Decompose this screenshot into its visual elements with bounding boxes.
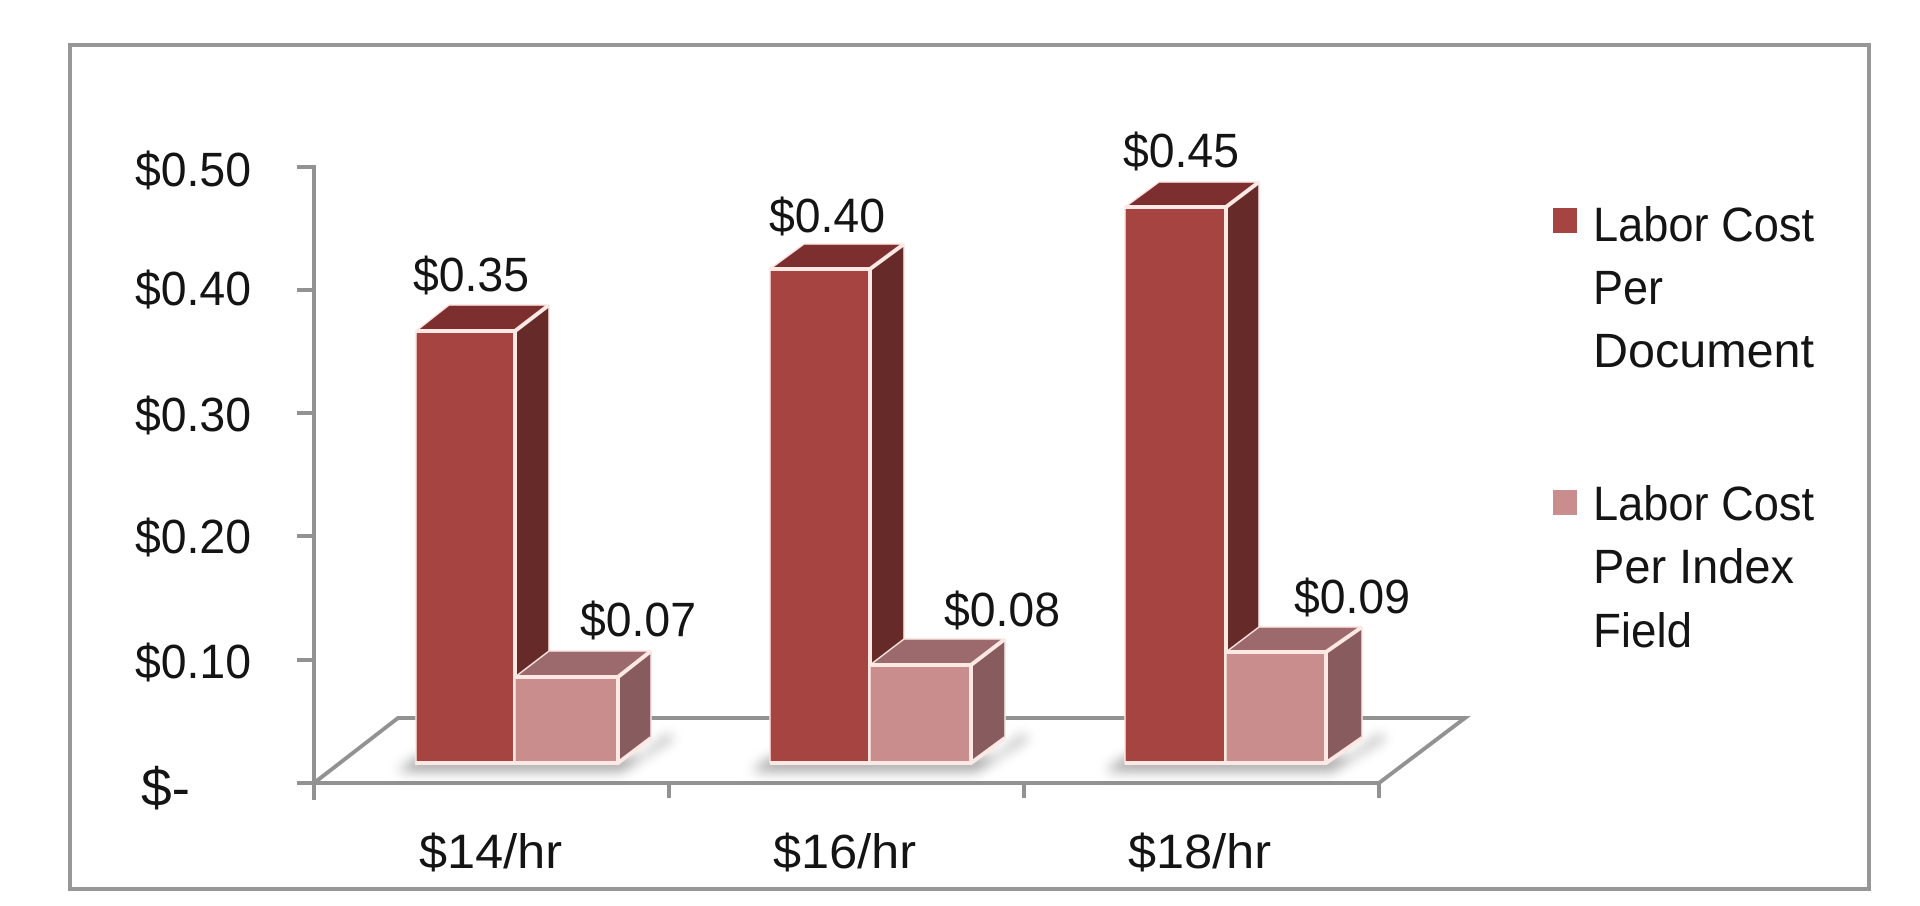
bar: labor cost per index field $0.09 xyxy=(1125,627,1362,763)
legend xyxy=(1553,199,1814,658)
bar: labor cost per index field $0.07 xyxy=(415,651,651,763)
y axis labels: $0.30 xyxy=(135,389,251,442)
bar group: $14/hr xyxy=(415,305,651,763)
legend: labor cost per index field: Field xyxy=(1593,605,1692,658)
x axis labels: $14/hr xyxy=(419,826,562,879)
bar shadows xyxy=(398,734,1386,772)
data labels: $0.09 xyxy=(1294,571,1410,624)
legend: labor cost per document xyxy=(1553,199,1814,378)
x axis labels xyxy=(419,826,1271,879)
y axis labels: $0.50 xyxy=(135,144,251,197)
y axis labels: $0.20 xyxy=(135,511,251,564)
legend: labor cost per document: Per xyxy=(1593,262,1663,315)
legend: labor cost per document: Document xyxy=(1593,325,1814,378)
x axis labels: $16/hr xyxy=(773,826,916,879)
data labels: $0.08 xyxy=(944,584,1060,637)
bar group: $16/hr xyxy=(770,244,1005,763)
bar: labor cost per index field $0.08 xyxy=(770,639,1005,763)
legend: labor cost per index field: Labor Cost xyxy=(1593,478,1814,531)
bar: labor cost per document $0.40 xyxy=(770,244,904,763)
data labels: $0.45 xyxy=(1123,125,1239,178)
bar: labor cost per document $0.45 xyxy=(1125,182,1259,763)
x axis labels: $18/hr xyxy=(1128,826,1271,879)
legend: labor cost per index field: Per Index xyxy=(1593,541,1794,594)
3D floor and x axis xyxy=(314,718,1465,798)
y axis labels xyxy=(135,144,251,818)
data labels: $0.07 xyxy=(580,594,696,647)
data labels: $0.40 xyxy=(769,190,885,243)
y axis with tick marks xyxy=(297,165,314,800)
data labels: $0.35 xyxy=(413,249,529,302)
y axis labels: $0.10 xyxy=(135,636,251,689)
data labels xyxy=(413,125,1410,647)
legend: labor cost per document: Labor Cost xyxy=(1593,199,1814,252)
legend: labor cost per index field xyxy=(1553,478,1814,658)
y axis labels: $0.40 xyxy=(135,263,251,316)
y axis labels: $- xyxy=(141,758,190,818)
bar: labor cost per document $0.35 xyxy=(416,305,549,763)
bar group: $18/hr xyxy=(1125,182,1362,763)
